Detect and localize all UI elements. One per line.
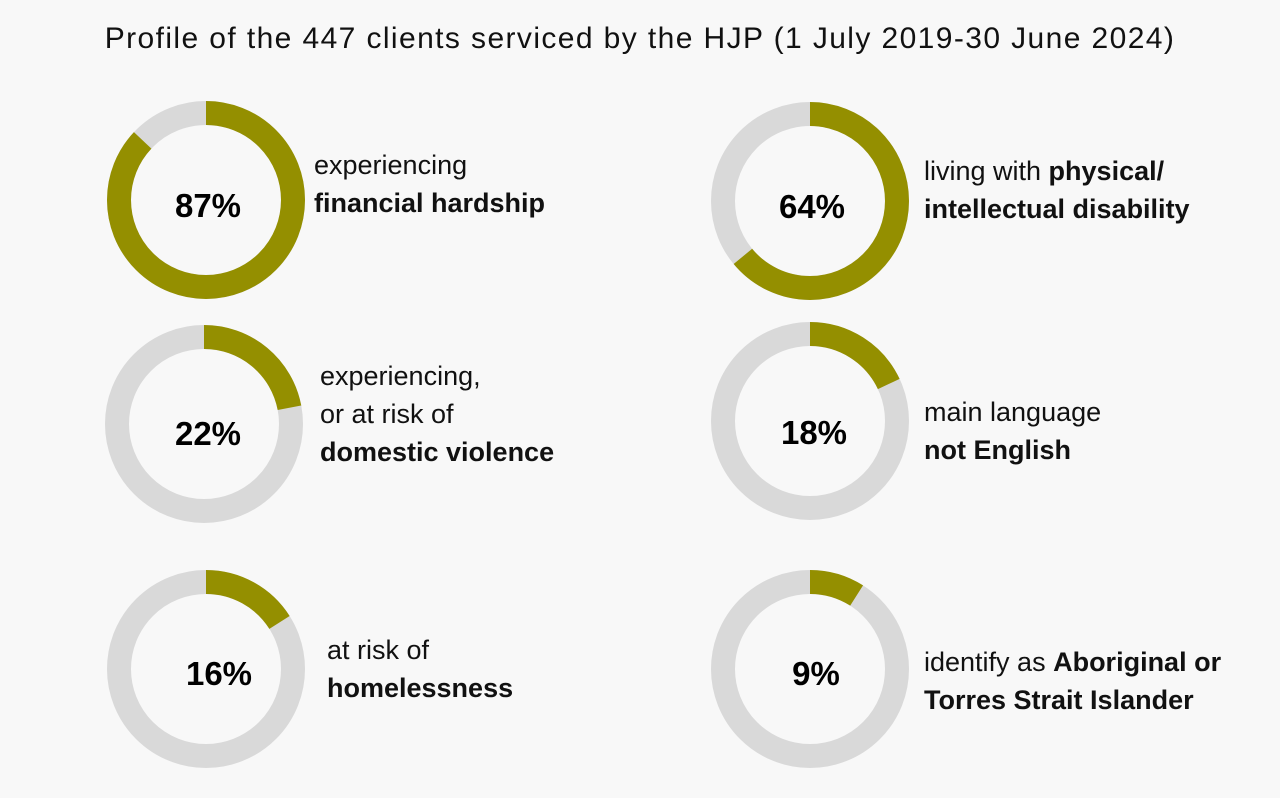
label: domestic violence: domestic violence [320,437,554,467]
donut: 87%: 87% [175,187,241,224]
label: homelessness [327,635,513,703]
donut: 64%: 64% [779,188,845,225]
label: financial hardship [314,150,545,218]
donut: 18%: 18% [781,414,847,451]
label: domestic violence [320,361,554,467]
label: language: main language [924,397,1101,427]
donut: 16% [119,582,293,756]
donut: 16%: 16% [186,655,252,692]
donut: 22%: 22% [175,415,241,452]
donut: 9% [723,582,897,756]
label: aboriginal: Torres Strait Islander [924,685,1194,715]
label: language [924,397,1101,465]
label: domestic violence: or at risk of [320,399,454,429]
label: disability [924,156,1190,224]
label: disability: living with physical/ [924,156,1164,186]
label: domestic violence: experiencing, [320,361,481,391]
label: aboriginal: identify as Aboriginal or [924,647,1221,677]
label: disability: intellectual disability [924,194,1190,224]
donut: 87% [119,113,293,287]
donut: 22% [117,337,291,511]
label: financial hardship: financial hardship [314,188,545,218]
label: homelessness: homelessness [327,673,513,703]
title: Profile of the 447 clients serviced by the HJP (1 July 2019-30 June 2024) [105,22,1175,55]
label: financial hardship: experiencing [314,150,467,180]
donut: 64% [723,114,897,288]
label: aboriginal [924,647,1221,715]
donut: 9%: 9% [792,655,840,692]
label: homelessness: at risk of [327,635,429,665]
label: language: not English [924,435,1071,465]
donut: 18% [723,334,897,508]
